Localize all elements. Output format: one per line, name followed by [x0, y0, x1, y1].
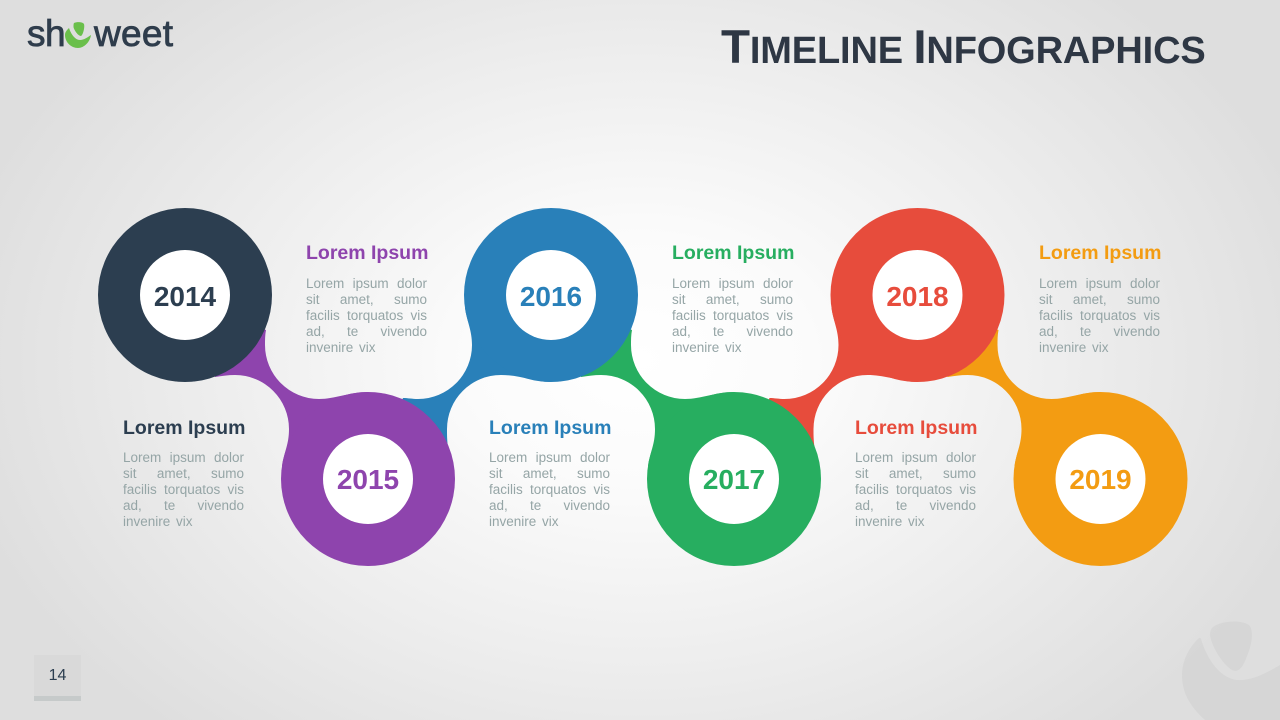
page number: 14 [49, 667, 66, 684]
node 2014 [98, 208, 272, 382]
text block: 2018: ad, te vivendo [855, 498, 976, 513]
node 2018 [734, 208, 1004, 479]
node 2019: 2019 [1069, 464, 1132, 495]
text block: 2017: invenire vix [672, 340, 742, 355]
text block: 2015: sit amet, sumo [306, 292, 427, 307]
text block: 2017: sit amet, sumo [672, 292, 793, 307]
heading: 2015: Lorem Ipsum [306, 242, 428, 264]
text block: 2014: sit amet, sumo [123, 466, 244, 481]
text block: 2016: facilis torquatos vis [489, 482, 610, 497]
text block: 2019: Lorem ipsum dolor [1039, 276, 1160, 291]
text block: 2016: invenire vix [489, 514, 559, 529]
heading: 2017: Lorem Ipsum [672, 242, 794, 264]
text block: 2016: Lorem ipsum dolor [489, 450, 610, 465]
text block: 2015: invenire vix [306, 340, 376, 355]
text block: 2015 [306, 276, 427, 355]
logo [27, 13, 174, 54]
heading: 2014: Lorem Ipsum [123, 417, 245, 439]
title: TIMELINE INFOGRAPHICS [721, 21, 1206, 74]
text block: 2015: facilis torquatos vis [306, 308, 427, 323]
heading: 2019: Lorem Ipsum [1039, 242, 1161, 264]
text block: 2015: ad, te vivendo [306, 324, 427, 339]
text block: 2014: invenire vix [123, 514, 193, 529]
node 2017: 2017 [703, 464, 765, 495]
heading: 2016: Lorem Ipsum [489, 417, 611, 439]
text block: 2014: Lorem ipsum dolor [123, 450, 244, 465]
text block: 2018 [855, 450, 976, 529]
logo: weet [94, 13, 173, 54]
page number [34, 655, 81, 701]
text block: 2017: Lorem ipsum dolor [672, 276, 793, 291]
icon: logo mark [65, 22, 91, 48]
node 2019 [918, 295, 1188, 566]
text block: 2017 [672, 276, 793, 355]
text block: 2019: ad, te vivendo [1039, 324, 1160, 339]
heading: 2018: Lorem Ipsum [855, 417, 977, 439]
text block: 2014: facilis torquatos vis [123, 482, 244, 497]
text block: 2016 [489, 450, 610, 529]
text block: 2018: invenire vix [855, 514, 925, 529]
text block: 2016: sit amet, sumo [489, 466, 610, 481]
text block: 2014 [123, 450, 244, 529]
text block: 2019: invenire vix [1039, 340, 1109, 355]
node 2017 [551, 295, 821, 566]
text block: 2017: ad, te vivendo [672, 324, 793, 339]
text block: 2014: ad, te vivendo [123, 498, 244, 513]
node 2016 [368, 208, 638, 479]
text block: 2017: facilis torquatos vis [672, 308, 793, 323]
text block: 2019 [1039, 276, 1160, 355]
logo: sh [27, 13, 65, 54]
text block: 2018: facilis torquatos vis [855, 482, 976, 497]
node 2018: 2018 [886, 281, 949, 312]
node 2016: 2016 [520, 281, 582, 312]
text block: 2016: ad, te vivendo [489, 498, 610, 513]
node 2015 [185, 295, 455, 566]
text block: 2015: Lorem ipsum dolor [306, 276, 427, 291]
text block: 2019: sit amet, sumo [1039, 292, 1160, 307]
text block: 2018: sit amet, sumo [855, 466, 976, 481]
text block: 2019: facilis torquatos vis [1039, 308, 1160, 323]
text block: 2018: Lorem ipsum dolor [855, 450, 976, 465]
node 2015: 2015 [337, 464, 399, 495]
node 2014: 2014 [154, 281, 217, 312]
